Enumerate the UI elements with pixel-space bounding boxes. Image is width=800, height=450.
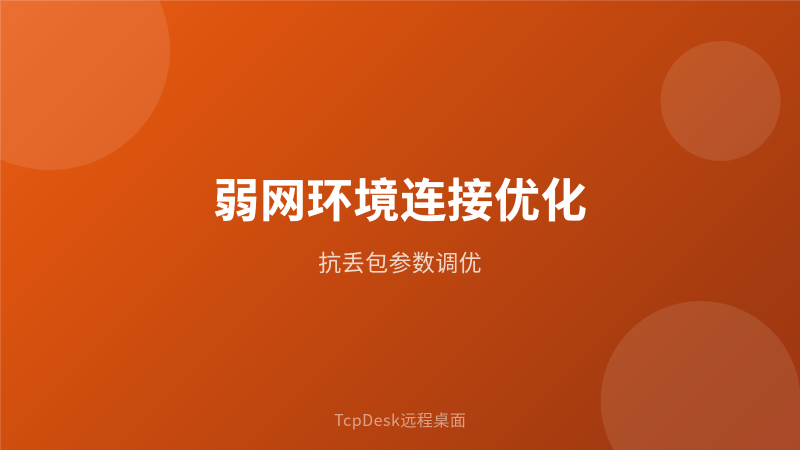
decorative circle: top left [0, 0, 170, 170]
decorative circle: bottom right [601, 301, 800, 450]
decorative circle: top right [661, 41, 781, 161]
footer brand: TcpDesk远程桌面 [334, 407, 466, 431]
title: 弱网环境连接优化 [213, 175, 588, 227]
subtitle: 抗丢包参数调优 [318, 250, 482, 276]
